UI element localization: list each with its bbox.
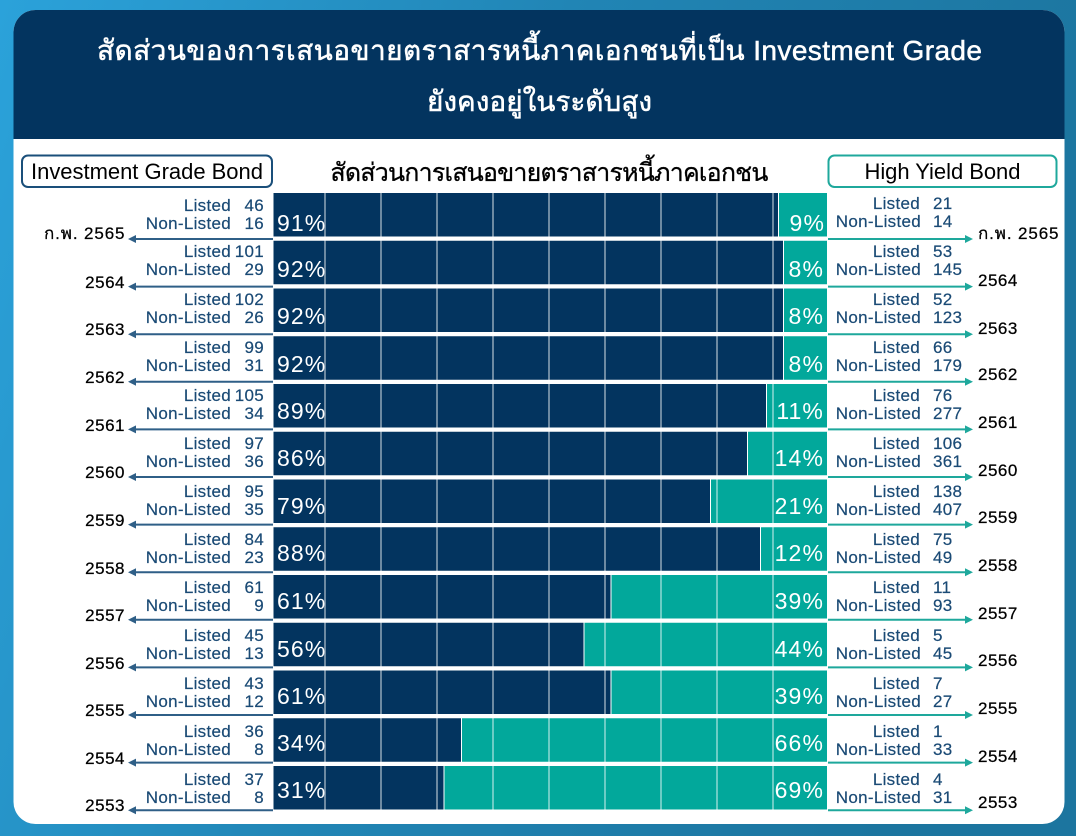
percent labels investment grade: 89% [277,398,326,424]
right listed and non-listed labels: Listed [873,722,920,741]
right counts: 75 [933,530,953,549]
right listed and non-listed labels: Listed [873,530,920,549]
right counts: 31 [933,788,953,807]
left year labels: 2558 [85,559,125,578]
left listed and non-listed counts: 97 [244,434,264,453]
right counts: 53 [933,242,953,261]
percent labels high yield: 44% [775,636,824,662]
left listed and non-listed counts: Non-Listed [146,260,231,279]
left listed and non-listed counts: 99 [244,338,264,357]
left listed and non-listed counts: 61 [244,578,264,597]
percent labels high yield: 8% [789,303,824,329]
left listed and non-listed counts: Listed [184,196,231,215]
left year labels [44,224,125,815]
right year labels [978,224,1059,812]
right year labels: 2558 [978,556,1018,575]
left listed and non-listed counts: 16 [244,214,264,233]
bar 2557 [274,575,827,618]
percent labels high yield: 11% [776,398,824,424]
left year labels: 2554 [85,749,125,768]
left listed and non-listed counts: Listed [184,386,231,405]
percent labels high yield: 12% [775,540,824,566]
left listed and non-listed counts: 37 [244,770,264,789]
right listed and non-listed labels: Non-Listed [836,596,921,615]
right counts: 407 [933,500,962,519]
right counts: 52 [933,290,953,309]
right listed and non-listed labels: Non-Listed [836,404,921,423]
right listed and non-listed labels: Listed [873,626,920,645]
left listed and non-listed counts: 36 [244,452,264,471]
right listed and non-listed labels: Non-Listed [836,692,921,711]
right listed and non-listed labels: Listed [873,386,920,405]
left listed and non-listed counts: 84 [244,530,264,549]
percent labels high yield: 21% [775,493,824,519]
chart heading: สัดส่วนการเสนอขายตราสารหนี้ภาคเอกชน [330,154,768,187]
right counts: 45 [933,644,953,663]
right year labels: 2559 [978,508,1018,527]
right year labels: 2562 [978,365,1018,384]
left listed and non-listed counts: 29 [244,260,264,279]
badge: high yield bond: High Yield Bond [864,159,1020,184]
right counts: 33 [933,740,953,759]
left listed and non-listed counts: Non-Listed [146,644,231,663]
right year labels: 2553 [978,793,1018,812]
bar 2553 [274,766,827,810]
bar 2565 [274,193,827,236]
left listed and non-listed counts: 105 [235,386,264,405]
left listed and non-listed counts: 12 [244,692,264,711]
right year labels: 2557 [978,604,1018,623]
right listed and non-listed labels: Non-Listed [836,452,921,471]
right year labels: 2561 [978,413,1018,432]
left listed and non-listed counts: 36 [244,722,264,741]
right counts: 14 [933,212,953,231]
percent labels investment grade: 79% [277,493,326,519]
percent labels investment grade: 31% [277,777,326,803]
right listed and non-listed labels: Listed [873,482,920,501]
right counts: 179 [933,356,962,375]
left listed and non-listed counts: Listed [184,578,231,597]
right listed and non-listed labels: Listed [873,194,920,213]
right counts: 1 [933,722,943,741]
right counts: 93 [933,596,953,615]
left listed and non-listed counts: 43 [244,674,264,693]
left listed and non-listed counts: Listed [184,434,231,453]
right year labels: 2555 [978,699,1018,718]
right listed and non-listed labels: Listed [873,674,920,693]
bar 2560 [274,432,827,475]
left year labels: 2563 [85,320,125,339]
left listed and non-listed counts: Listed [184,482,231,501]
percent labels investment grade: 91% [277,210,326,236]
left listed and non-listed counts: Non-Listed [146,214,231,233]
right counts: 27 [933,692,953,711]
title: ยังคงอยู่ในระดับสูง [427,85,652,119]
left listed and non-listed counts: 8 [254,788,264,807]
right year labels: 2564 [978,271,1018,290]
right counts [933,194,962,807]
right year labels: 2560 [978,461,1018,480]
right counts: 277 [933,404,962,423]
percent labels investment grade: 56% [277,636,326,662]
stacked bar chart [274,193,827,810]
left year labels: ก.พ. 2565 [44,224,125,243]
left year labels: 2556 [85,654,125,673]
left listed and non-listed counts: 13 [244,644,264,663]
left listed and non-listed counts: Listed [184,722,231,741]
left listed and non-listed counts: Non-Listed [146,548,231,567]
left listed and non-listed counts: 102 [235,290,264,309]
right counts: 7 [933,674,943,693]
right counts: 361 [933,452,962,471]
left listed and non-listed counts: Listed [184,242,231,261]
right listed and non-listed labels: Listed [873,578,920,597]
percent labels high yield: 39% [775,683,824,709]
badge: investment grade bond: Investment Grade Bond [31,159,263,184]
right counts: 4 [933,770,943,789]
right year labels: 2563 [978,319,1018,338]
right listed and non-listed labels: Listed [873,290,920,309]
percent labels investment grade: 61% [277,683,326,709]
right listed and non-listed labels: Listed [873,242,920,261]
right counts: 106 [933,434,962,453]
percent labels investment grade: 92% [277,303,326,329]
right listed and non-listed labels: Listed [873,770,920,789]
percent labels high yield [775,210,825,803]
percent labels high yield: 9% [790,210,825,236]
percent labels investment grade: 92% [277,351,326,377]
percent labels high yield: 8% [789,351,824,377]
percent labels high yield: 14% [775,445,824,471]
left listed and non-listed counts: Non-Listed [146,500,231,519]
header band [14,10,1064,139]
left listed and non-listed counts: 46 [244,196,264,215]
right counts: 66 [933,338,953,357]
left listed and non-listed counts: Non-Listed [146,596,231,615]
bar 2562 [274,336,827,380]
bar 2561 [274,384,827,428]
left year labels: 2555 [85,701,125,720]
left listed and non-listed counts: Non-Listed [146,452,231,471]
left listed and non-listed counts: Listed [184,530,231,549]
right counts: 76 [933,386,953,405]
left year labels: 2559 [85,511,125,530]
left listed and non-listed counts: 35 [244,500,264,519]
right counts: 21 [933,194,953,213]
left year labels: 2561 [85,416,125,435]
left listed and non-listed counts: Non-Listed [146,692,231,711]
right listed and non-listed labels: Non-Listed [836,260,921,279]
left listed and non-listed counts: Non-Listed [146,404,231,423]
right listed and non-listed labels: Non-Listed [836,356,921,375]
bar 2564 [274,241,827,284]
bar 2563 [274,288,827,332]
right listed and non-listed labels: Non-Listed [836,788,921,807]
right listed and non-listed labels: Non-Listed [836,212,921,231]
left year labels: 2564 [85,273,125,292]
left listed and non-listed counts: Non-Listed [146,740,231,759]
bar 2559 [274,480,827,523]
left listed and non-listed counts: Listed [184,290,231,309]
left listed and non-listed counts: 31 [244,356,264,375]
left arrows [128,235,273,814]
left listed and non-listed counts: Non-Listed [146,788,231,807]
left year labels: 2562 [85,368,125,387]
right arrows [828,235,973,814]
left listed and non-listed counts: Non-Listed [146,356,231,375]
right listed and non-listed labels: Non-Listed [836,500,921,519]
percent labels high yield: 66% [775,730,824,756]
right counts: 123 [933,308,962,327]
left year labels: 2553 [85,796,125,815]
left listed and non-listed counts: 9 [254,596,264,615]
percent labels investment grade: 92% [277,256,326,282]
right listed and non-listed labels: Non-Listed [836,548,921,567]
left listed and non-listed counts: Listed [184,770,231,789]
right listed and non-listed labels [836,194,921,807]
bar 2554 [274,718,827,762]
percent labels investment grade: 34% [277,730,326,756]
percent labels high yield: 69% [775,777,824,803]
bar 2556 [274,623,827,666]
right listed and non-listed labels: Non-Listed [836,740,921,759]
left year labels: 2560 [85,463,125,482]
right counts: 5 [933,626,943,645]
bar 2558 [274,527,827,571]
right year labels: ก.พ. 2565 [978,224,1059,243]
left listed and non-listed counts: 45 [244,626,264,645]
right listed and non-listed labels: Non-Listed [836,308,921,327]
left listed and non-listed counts: Listed [184,626,231,645]
left listed and non-listed counts: Listed [184,338,231,357]
percent labels investment grade [277,210,326,803]
right listed and non-listed labels: Listed [873,434,920,453]
right listed and non-listed labels: Non-Listed [836,644,921,663]
right year labels: 2554 [978,747,1018,766]
percent labels investment grade: 61% [277,588,326,614]
right counts: 49 [933,548,953,567]
left listed and non-listed counts: 8 [254,740,264,759]
left listed and non-listed counts: 101 [235,242,264,261]
left listed and non-listed counts [146,196,264,807]
bar 2555 [274,670,827,714]
percent labels high yield: 8% [789,256,824,282]
left year labels: 2557 [85,606,125,625]
left listed and non-listed counts: 95 [244,482,264,501]
right counts: 11 [933,578,951,597]
title [97,30,982,119]
left listed and non-listed counts: Non-Listed [146,308,231,327]
right counts: 145 [933,260,962,279]
title: สัดส่วนของการเสนอขายตราสารหนี้ภาคเอกชนที่เป็น Investment Grade [97,30,982,66]
badge: high yield bond [828,156,1056,187]
right listed and non-listed labels: Listed [873,338,920,357]
left listed and non-listed counts: 26 [244,308,264,327]
left listed and non-listed counts: 34 [244,404,264,423]
right year labels: 2556 [978,651,1018,670]
right counts: 138 [933,482,962,501]
percent labels investment grade: 86% [277,445,326,471]
percent labels investment grade: 88% [277,540,326,566]
percent labels high yield: 39% [775,588,824,614]
left listed and non-listed counts: Listed [184,674,231,693]
left listed and non-listed counts: 23 [244,548,264,567]
